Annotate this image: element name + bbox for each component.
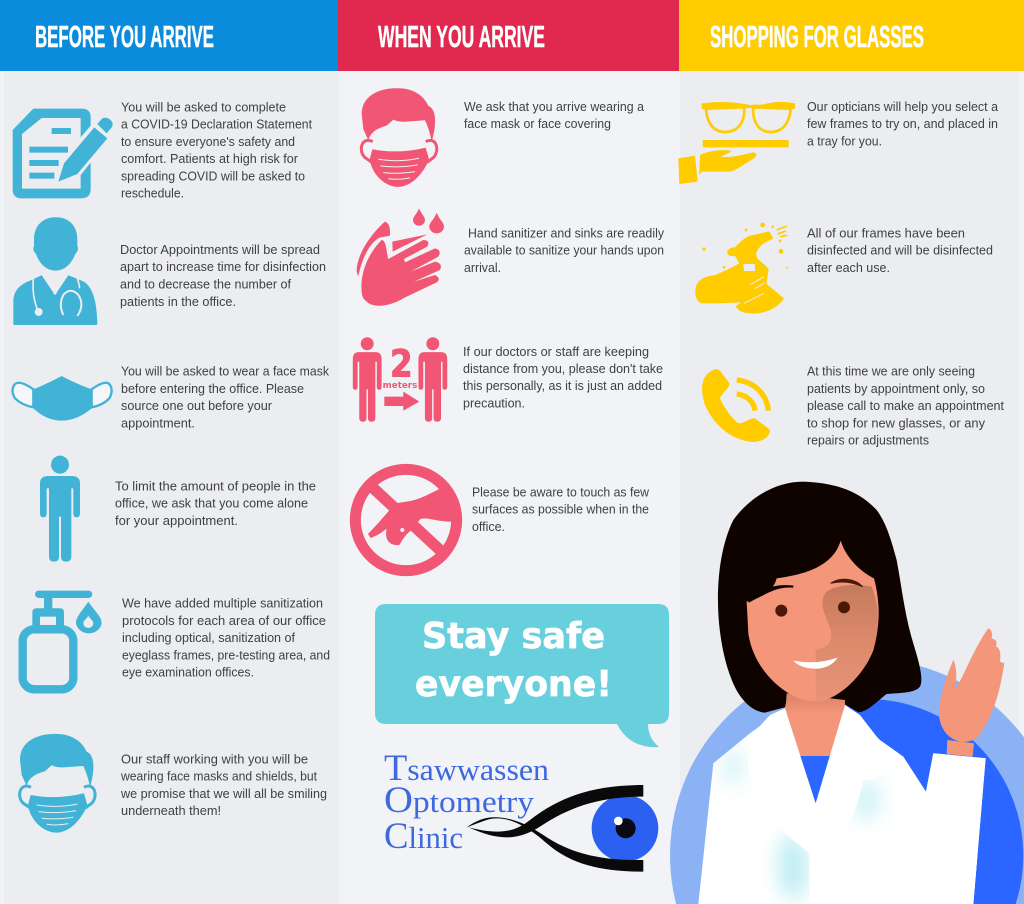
text: hand sanitizer: Hand sanitizer and sinks are readily — [468, 226, 664, 240]
text: declaration statement: comfort. Patients at high risk for — [121, 151, 299, 166]
icon: spray bottle and hand — [695, 223, 788, 314]
text: appointment only: please call to make an appointment — [807, 398, 1004, 413]
icon: two meters distance: 2 — [390, 342, 413, 386]
panel: shopping for glasses — [670, 0, 1024, 904]
text: wear a face mask — [121, 364, 329, 430]
text: appointment only: repairs or adjustments — [807, 432, 929, 448]
text: hand sanitizer — [464, 226, 664, 275]
speech bubble: stay safe everyone: everyone! — [415, 664, 612, 705]
text: opticians: a tray for you. — [807, 134, 882, 148]
icon: two meters distance — [353, 337, 447, 422]
text: declaration statement: to ensure everyone's safety and — [121, 134, 295, 149]
text: opticians — [807, 99, 999, 148]
text: come alone: for your appointment. — [115, 513, 238, 528]
icon: person — [40, 456, 80, 562]
background circles — [670, 659, 1024, 904]
text: keeping distance: distance from you, please don't take — [463, 361, 663, 376]
header: when you arrive: WHEN YOU ARRIVE — [378, 19, 545, 54]
text: sanitization protocols: protocols for each area of our office — [122, 613, 326, 628]
icon: glasses on tray — [678, 102, 795, 184]
text: appointment only: patients by appointment only, so — [807, 381, 985, 396]
logo: Tsawwassen Optometry Clinic: Optometry — [384, 780, 535, 821]
text: keeping distance: this personally, as it is just an added — [463, 378, 662, 393]
text: hand sanitizer: arrival. — [464, 260, 501, 275]
text: staff masks and shields: Our staff working with you will be — [121, 752, 308, 766]
text: frames disinfected: disinfected and will be disinfected — [807, 242, 993, 258]
text: declaration statement: spreading COVID will be asked to — [121, 168, 305, 183]
text: keeping distance: precaution. — [463, 396, 525, 410]
text: appointment only: At this time we are only seeing — [807, 364, 975, 378]
text: staff masks and shields: underneath them! — [121, 803, 221, 818]
text: sanitization protocols: eye examination offices. — [122, 664, 254, 680]
text: frames disinfected — [807, 226, 993, 275]
text: wear a face mask: source one out before your — [121, 398, 273, 413]
smile — [793, 658, 838, 669]
icon: hands and drops — [357, 208, 444, 306]
lab coat — [698, 705, 986, 904]
text: sanitization protocols — [122, 596, 330, 680]
text: frames disinfected: after each use. — [807, 260, 890, 275]
text: staff masks and shields — [120, 752, 327, 818]
text: doctor appointments — [120, 242, 326, 309]
icon: telephone — [702, 369, 770, 442]
text: touch few surfaces — [472, 484, 650, 534]
text: come alone: office, we ask that you come alone — [115, 496, 308, 510]
text: doctor appointments: Doctor Appointments will be spread — [120, 242, 320, 257]
text: doctor appointments: apart to increase time for disinfection — [120, 259, 326, 274]
hair — [718, 482, 921, 713]
icon: sanitizer bottle — [23, 591, 102, 689]
icon: doctor — [13, 217, 97, 325]
icon: no touching sign — [355, 469, 457, 571]
icon: two meters distance: meters — [383, 381, 417, 391]
text: staff masks and shields: we promise that we will all be smiling — [120, 786, 327, 801]
face — [747, 541, 879, 702]
icon: masked man — [361, 88, 437, 187]
text: staff masks and shields: wearing face masks and shields, but — [120, 768, 317, 784]
text: sanitization protocols: We have added multiple sanitization — [122, 596, 323, 610]
text: declaration statement: You will be asked to complete — [121, 100, 286, 114]
text: doctor appointments: and to decrease the number of — [120, 276, 291, 292]
text: wear mask on arrival — [464, 99, 645, 131]
text: declaration statement: a COVID-19 Declaration Statement — [121, 117, 312, 132]
eyes and brows — [748, 579, 863, 617]
text: touch few surfaces: Please be aware to touch as few — [472, 484, 650, 500]
text: doctor appointments: patients in the office. — [120, 294, 236, 309]
text: touch few surfaces: surfaces as possible when in the — [472, 502, 649, 516]
panel: when you arrive — [338, 0, 679, 872]
text: wear mask on arrival: face mask or face covering — [464, 116, 611, 131]
text: keeping distance: If our doctors or staff are keeping — [463, 344, 649, 359]
text: sanitization protocols: eyeglass frames, pre-testing area, and — [122, 648, 330, 662]
text: wear a face mask: before entering the office. Please — [121, 381, 304, 396]
icon: masked man — [20, 734, 95, 833]
speech bubble: stay safe everyone: Stay safe — [422, 616, 605, 657]
icon: face mask — [12, 376, 112, 421]
text: wear mask on arrival: We ask that you arrive wearing a — [464, 99, 645, 114]
text: come alone: To limit the amount of people in the — [115, 478, 316, 494]
header: before you arrive — [0, 0, 338, 71]
neck — [785, 693, 845, 756]
text: wear a face mask: You will be asked to wear a face mask — [121, 364, 329, 378]
blue shirt — [798, 756, 832, 835]
panel: before you arrive — [0, 0, 339, 904]
illustration: waving optician — [670, 482, 1024, 904]
header: before you arrive: BEFORE YOU ARRIVE — [35, 19, 214, 54]
text: frames disinfected: All of our frames have been — [807, 226, 965, 240]
face shading — [816, 585, 878, 702]
text: appointment only — [807, 364, 1004, 448]
text: opticians: few frames to try on, and placed in — [807, 116, 998, 131]
waving hand — [939, 628, 1004, 757]
text: declaration statement: reschedule. — [121, 186, 184, 200]
icon: eye — [463, 785, 658, 872]
text: come alone — [115, 478, 316, 528]
text: hand sanitizer: available to sanitize your hands upon — [464, 242, 664, 258]
text: appointment only: to shop for new glasses, or any — [807, 416, 985, 430]
text: keeping distance — [463, 344, 663, 410]
text: sanitization protocols: including optical, sanitization of — [122, 630, 295, 645]
text: wear a face mask: appointment. — [121, 416, 195, 430]
header: shopping for glasses — [679, 0, 1024, 71]
logo: Tsawwassen Optometry Clinic: Tsawwassen — [384, 748, 550, 789]
text: opticians: Our opticians will help you select a — [807, 99, 999, 114]
logo: Tsawwassen Optometry Clinic: Clinic — [384, 816, 463, 857]
header: when you arrive — [338, 0, 679, 71]
icon: clipboard with pen — [13, 109, 115, 198]
text: touch few surfaces: office. — [472, 519, 505, 534]
text: declaration statement — [121, 100, 312, 200]
logo: Tsawwassen Optometry Clinic — [384, 748, 658, 872]
speech bubble: stay safe everyone — [375, 604, 669, 747]
